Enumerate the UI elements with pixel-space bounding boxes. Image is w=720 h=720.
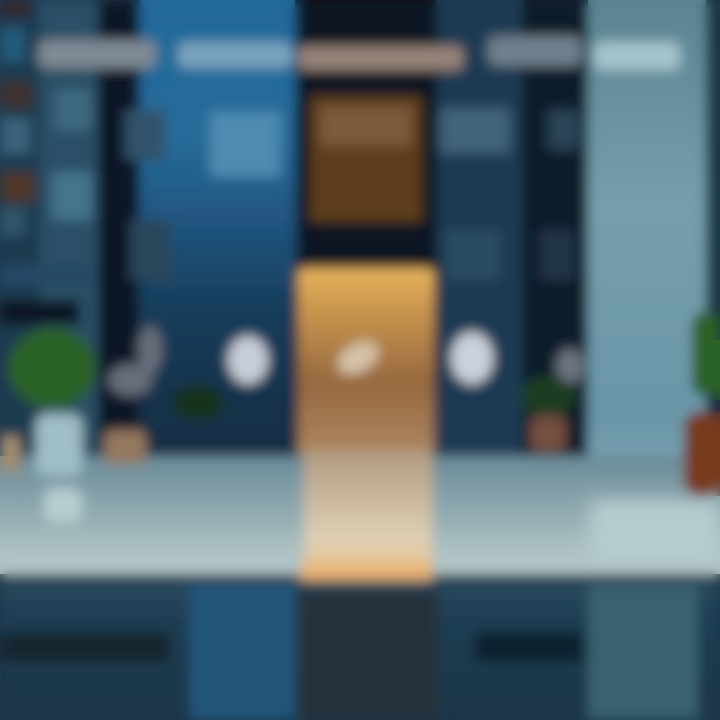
icon: small plant right of door xyxy=(520,376,576,452)
panel: brown wood upper door xyxy=(310,96,422,222)
icon: door emblem xyxy=(332,335,384,381)
icon: large plant and red pot on the right xyxy=(684,312,720,496)
icon: dark shrub left of door xyxy=(172,384,224,420)
icon: far-left wall light xyxy=(108,326,162,396)
icon: large plant on the left xyxy=(8,328,96,522)
icon: far-right wall light xyxy=(556,348,584,384)
panel: pale glass column on the right xyxy=(588,0,706,520)
panel: dark right edge xyxy=(706,0,720,340)
window grid: left and right wall panels xyxy=(0,0,580,325)
title: blurred heading strip xyxy=(38,36,680,70)
icon: right globe light xyxy=(451,332,493,384)
icon: small pot far left xyxy=(0,436,20,472)
icon: left globe light xyxy=(228,336,268,384)
icon: terracotta pot left xyxy=(104,430,146,464)
panel: dark reflective lower floor xyxy=(0,564,720,720)
panel: lit golden door xyxy=(298,268,434,458)
panel: blue central-left column xyxy=(140,0,295,460)
panel: marble floor xyxy=(0,450,720,576)
panel: dark centre top xyxy=(300,0,436,270)
